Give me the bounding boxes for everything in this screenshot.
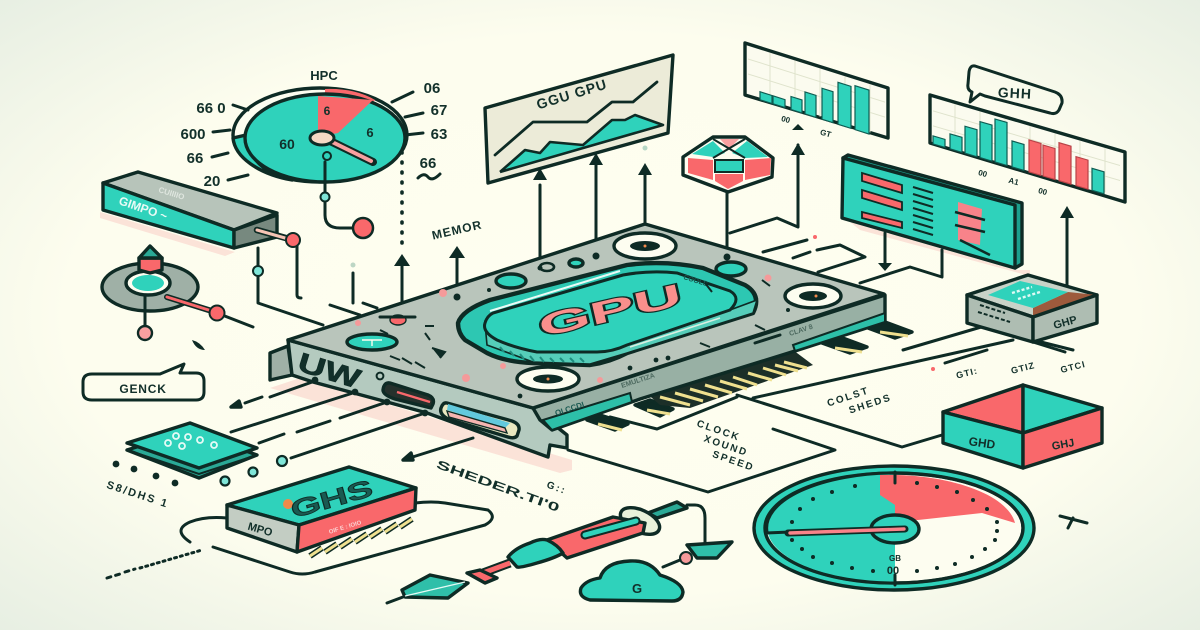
label: CLOCK SOUND SPEED — [687, 418, 764, 474]
hexagon icon — [683, 137, 773, 192]
label: COLST SHEDS: COLST — [826, 385, 871, 409]
small arrowheads on lower lines — [231, 401, 413, 460]
GHS memory chip: GHS — [288, 475, 376, 524]
pink drop shadows — [100, 212, 1030, 473]
label: G: G:: — [545, 480, 568, 497]
PCB top — [288, 224, 884, 408]
label: CLOCK SOUND SPEED: CLOCK — [695, 418, 742, 444]
label: CLOCK SOUND SPEED: XOUND — [702, 434, 749, 459]
label: SHEDER.TI'0: SHEDER.TI'0 — [435, 457, 562, 515]
teal chip with circuit dots — [113, 423, 287, 486]
label: COLST SHEDS: SHEDS — [848, 392, 893, 417]
gauge labels: 06 — [424, 80, 440, 97]
cube: GHD: GHD — [968, 434, 997, 452]
side strip: CLAV 8 — [788, 324, 814, 338]
gauge labels: 66 0 — [196, 100, 226, 117]
gauge coral wedge — [880, 475, 1015, 523]
knob icon — [102, 246, 356, 350]
gauge: HPC — [180, 68, 447, 238]
label: COLST SHEDS — [826, 385, 893, 417]
small arrowhead mark — [1060, 516, 1087, 528]
connector lines — [107, 145, 1073, 578]
board components — [355, 252, 790, 398]
bracket plate: UW — [294, 347, 365, 395]
GPU block: GPU — [535, 277, 685, 344]
syringe tool — [387, 502, 732, 603]
label: MEMOR: MEMOR — [431, 217, 483, 243]
gauge labels: 66 — [187, 150, 203, 167]
bar chart: top: 00 — [780, 114, 792, 125]
gauge labels: 6 — [324, 104, 331, 118]
GHS memory chip: MPO — [246, 521, 274, 539]
bracket plate — [270, 340, 567, 457]
cube: GHD — [943, 385, 1102, 468]
callout: GHH — [968, 66, 1062, 114]
GTI labels — [955, 359, 1087, 381]
cube: GHD: GHJ — [1051, 437, 1075, 453]
GTI labels: GTIZ — [1010, 360, 1036, 376]
slanted GIMPO box: CUIIIIO — [157, 185, 186, 202]
bar chart: top right: 00 — [1037, 186, 1049, 197]
GHP box — [967, 275, 1097, 342]
board rings — [347, 233, 841, 391]
gauge tick dots — [790, 481, 999, 573]
connector fingers — [587, 322, 912, 430]
gauge needle — [766, 515, 919, 543]
side strip: EMULTIZA — [620, 372, 656, 390]
line chart board: GGU GPU: GGU GPU — [534, 76, 609, 112]
callout: GENCK — [83, 364, 204, 400]
teal data panel — [842, 155, 1022, 268]
gauge labels: 600 — [180, 126, 206, 143]
port 1 — [383, 383, 433, 408]
bar chart: top right: 00 — [977, 168, 989, 179]
cloud icon: G — [632, 581, 642, 596]
side strip: OI CCDI — [554, 400, 585, 418]
speed gauge: 00 — [887, 565, 899, 577]
GTI labels: GTCI — [1059, 359, 1087, 375]
gauge labels: 6 — [366, 125, 374, 140]
callout: GHH: GHH — [997, 84, 1032, 102]
GHS memory chip — [227, 467, 416, 556]
arrows into board — [394, 124, 1074, 318]
gauge labels — [180, 68, 447, 190]
callout: GENCK: GENCK — [119, 382, 167, 396]
side strip — [533, 295, 885, 430]
gauge labels: 66 — [420, 155, 436, 172]
bar chart: top right — [930, 95, 1125, 202]
bar chart: top right: A1 — [1008, 176, 1020, 187]
gauge labels: 63 — [431, 126, 447, 143]
bar chart: top: GT — [819, 128, 832, 139]
gauge labels: 20 — [204, 173, 220, 190]
gauge wedge — [318, 96, 373, 137]
speed gauge — [754, 466, 1034, 590]
chip pins — [310, 519, 412, 556]
bar chart: top — [745, 43, 888, 139]
gauge labels: 67 — [431, 102, 447, 119]
gauge labels: 60 — [279, 136, 295, 152]
cloud icon — [580, 561, 683, 601]
coral dots — [813, 235, 935, 371]
dotted line — [400, 152, 404, 247]
gauge labels: HPC — [310, 68, 338, 83]
graphics card — [270, 224, 912, 457]
GHP box: GHP — [1052, 314, 1078, 332]
GHS memory chip: OIF E : IOIO — [328, 520, 363, 536]
GTI labels: GTI: — [955, 365, 979, 381]
slanted GIMPO box: GIMPO ~ — [117, 194, 169, 223]
GPU block — [458, 263, 757, 365]
speed gauge: GB — [889, 554, 901, 563]
label: S8/DHS: S8/DHS 1 — [105, 479, 170, 511]
label: CLOCK SOUND SPEED: SPEED — [711, 449, 756, 474]
gauge teal half — [767, 474, 895, 582]
line chart board: GGU GPU — [485, 55, 673, 183]
slanted GIMPO box — [103, 172, 300, 276]
gauge needle — [310, 131, 373, 162]
port 2 — [441, 403, 519, 438]
GPU block: COOLS — [682, 274, 709, 288]
